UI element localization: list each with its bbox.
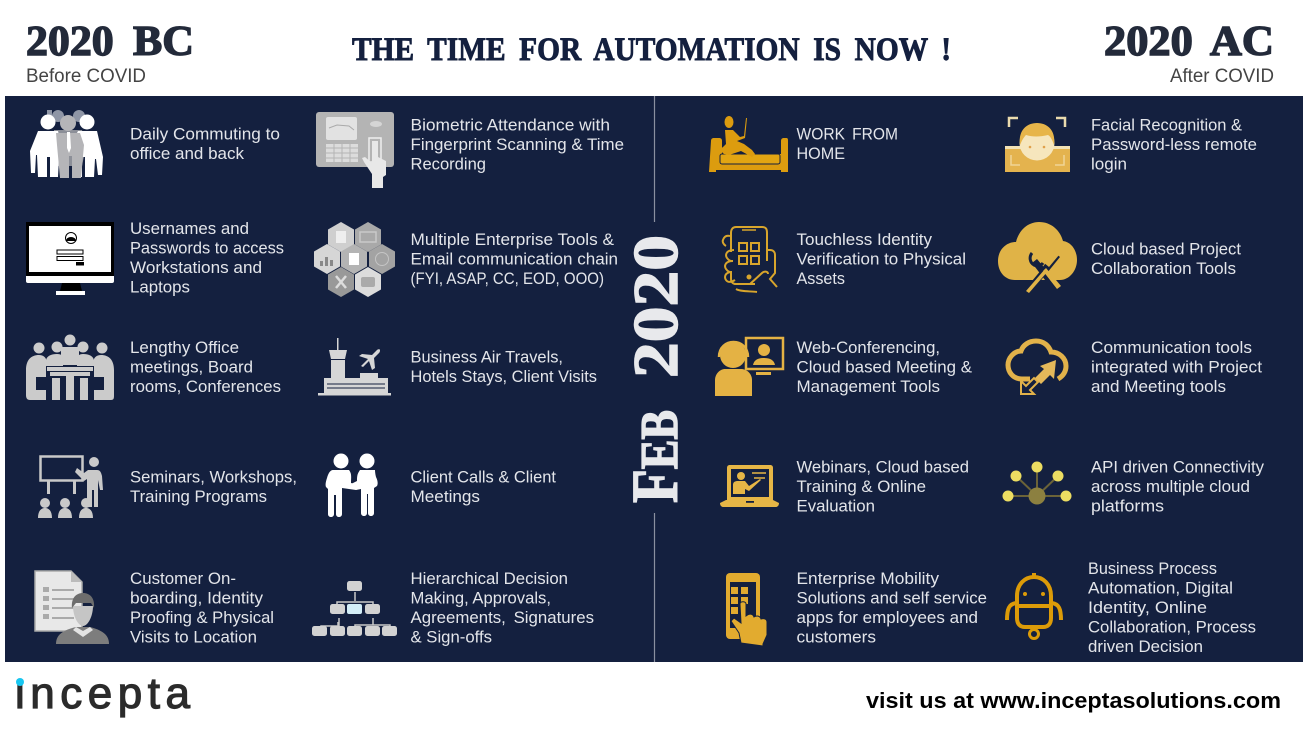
icon: airport	[318, 338, 391, 396]
text: Training Programs	[130, 487, 267, 506]
text: platforms	[1091, 496, 1164, 516]
text	[130, 338, 281, 396]
icon: person on couch with laptop	[709, 116, 788, 172]
icon: trainer and audience	[38, 456, 103, 518]
item: communication tools	[1008, 338, 1262, 396]
item: touchless identity	[723, 227, 966, 292]
heading: 2020 BC: Before COVID	[26, 66, 146, 87]
text: & Sign-offs	[410, 628, 492, 646]
text: Hierarchical Decision	[410, 569, 568, 588]
text	[1091, 458, 1265, 516]
icon: org chart	[312, 581, 397, 636]
text: integrated with Project	[1091, 358, 1262, 376]
item: seminars	[38, 456, 297, 518]
text: Biometric Attendance with	[410, 116, 610, 134]
icon: handshake	[326, 454, 378, 517]
text: Facial Recognition &	[1091, 116, 1242, 134]
text: boarding, Identity	[130, 588, 264, 608]
text: and Meeting tools	[1091, 377, 1226, 396]
text: Visits to Location	[130, 628, 257, 646]
text: Automation, Digital	[1088, 578, 1233, 598]
heading: 2020 AC	[1104, 19, 1274, 87]
text: Collaboration Tools	[1091, 259, 1236, 278]
item: biometric attendance	[316, 112, 624, 188]
icon: cloud with tools	[998, 222, 1077, 297]
text: office and back	[130, 144, 245, 163]
heading: 2020 BC	[26, 19, 194, 87]
center label: Feb 2020: 2020	[620, 235, 691, 378]
text: Laptops	[130, 278, 190, 296]
text: Webinars, Cloud based	[796, 458, 969, 476]
item: business process automation	[1007, 559, 1256, 656]
text: Agreements, Signatures	[410, 608, 594, 627]
text: login	[1091, 154, 1127, 174]
text: Meetings	[410, 487, 480, 506]
text: Enterprise Mobility	[796, 569, 940, 588]
text: Multiple Enterprise Tools &	[410, 230, 614, 249]
text	[796, 124, 898, 163]
text: Management Tools	[796, 377, 940, 396]
logo: incepta: incepta	[15, 669, 191, 718]
text: Solutions and self service	[796, 588, 987, 608]
text: Hotels Stays, Client Visits	[410, 367, 597, 386]
icon: commuters	[30, 110, 103, 178]
icon: robot	[1007, 573, 1061, 638]
item: enterprise tools	[314, 222, 618, 297]
text	[130, 468, 297, 506]
text: Verification to Physical	[796, 250, 966, 268]
text	[410, 348, 597, 386]
icon: cloud with arrows	[1008, 341, 1066, 394]
text: Workstations and	[130, 258, 262, 277]
text: across multiple cloud	[1091, 477, 1250, 496]
item: api connectivity	[1002, 458, 1265, 516]
item: cloud collaboration	[998, 222, 1241, 297]
text: Assets	[796, 269, 845, 288]
icon: mobile with hand	[726, 573, 767, 646]
center label: Feb 2020	[619, 235, 692, 503]
text: API driven Connectivity	[1091, 458, 1265, 476]
text	[1091, 240, 1241, 278]
item: usernames and passwords	[26, 219, 284, 296]
text: Communication tools	[1091, 338, 1252, 357]
text	[130, 124, 280, 163]
item: web conferencing	[715, 338, 972, 396]
text	[796, 230, 966, 288]
item: office meetings	[26, 334, 281, 400]
icon: boardroom meeting	[26, 334, 114, 400]
icon: document and person	[35, 571, 109, 644]
text: Business Process	[1088, 559, 1217, 578]
text: HOME	[796, 144, 845, 163]
item: customer onboarding	[35, 569, 274, 646]
text	[1091, 338, 1262, 396]
text	[410, 569, 594, 646]
text	[410, 116, 624, 174]
text: Client Calls & Client	[410, 468, 556, 486]
icon: headset agent and screen	[715, 338, 783, 396]
icon: monitor login	[26, 222, 114, 295]
text: apps for employees and	[796, 608, 978, 627]
item: hierarchical decisions	[312, 569, 594, 646]
text	[130, 219, 284, 296]
text: Cloud based Meeting &	[796, 358, 972, 376]
text	[410, 230, 618, 288]
text: driven Decision	[1088, 637, 1203, 656]
item: enterprise mobility	[726, 569, 987, 646]
icon: face scan	[1005, 118, 1070, 172]
text: Recording	[410, 154, 486, 174]
text: rooms, Conferences	[130, 377, 281, 396]
text: Training & Online	[796, 477, 926, 496]
text: Seminars, Workshops,	[130, 468, 297, 486]
text	[796, 338, 972, 396]
text: Touchless Identity	[796, 230, 933, 249]
text: customers	[796, 628, 876, 646]
item: webinars	[720, 458, 969, 516]
icon: hexagons	[314, 222, 395, 297]
footer link: visit us at www.inceptasolutions.com	[866, 688, 1281, 713]
icon: laptop with presenter	[720, 465, 779, 507]
icon: fingerprint terminal	[316, 112, 394, 188]
text: Customer On-	[130, 569, 236, 588]
item: work from home	[709, 116, 898, 172]
text: meetings, Board	[130, 358, 253, 376]
text: Identity, Online	[1088, 598, 1207, 617]
text: Password-less remote	[1091, 135, 1257, 154]
text: Evaluation	[796, 496, 875, 516]
text: Fingerprint Scanning & Time	[410, 135, 624, 154]
text	[410, 468, 556, 506]
icon: network nodes	[1002, 462, 1072, 504]
text	[796, 569, 987, 646]
heading: 2020 AC: 2020 AC	[1104, 19, 1274, 65]
text: Proofing & Physical	[130, 608, 274, 627]
text: Business Air Travels,	[410, 348, 563, 366]
text	[1088, 559, 1256, 656]
item: daily commuting	[30, 110, 280, 178]
text: Email communication chain	[410, 250, 618, 268]
item: client calls	[326, 454, 556, 517]
text: Collaboration, Process	[1088, 618, 1256, 636]
text: Web-Conferencing,	[796, 338, 940, 357]
text: Usernames and	[130, 219, 249, 238]
text: Daily Commuting to	[130, 124, 280, 144]
panel: main background	[5, 96, 1303, 662]
text: WORK FROM	[796, 124, 898, 144]
item: facial recognition	[1005, 116, 1257, 174]
text: Lengthy Office	[130, 338, 239, 357]
item: air travel	[318, 338, 597, 396]
text	[796, 458, 969, 516]
text: Passwords to access	[130, 238, 284, 258]
text	[130, 569, 274, 646]
heading: 2020 AC: After COVID	[1170, 66, 1274, 87]
center label: Feb 2020: FEB	[619, 410, 692, 503]
icon: phone with QR code	[723, 227, 777, 292]
heading: 2020 BC: 2020 BC	[26, 19, 194, 65]
text	[1091, 116, 1257, 174]
text: Cloud based Project	[1091, 240, 1241, 258]
text: (FYI, ASAP, CC, EOD, OOO)	[410, 269, 604, 288]
text: Making, Approvals,	[410, 588, 551, 608]
title: THE TIME FOR AUTOMATION IS NOW !	[352, 32, 951, 68]
